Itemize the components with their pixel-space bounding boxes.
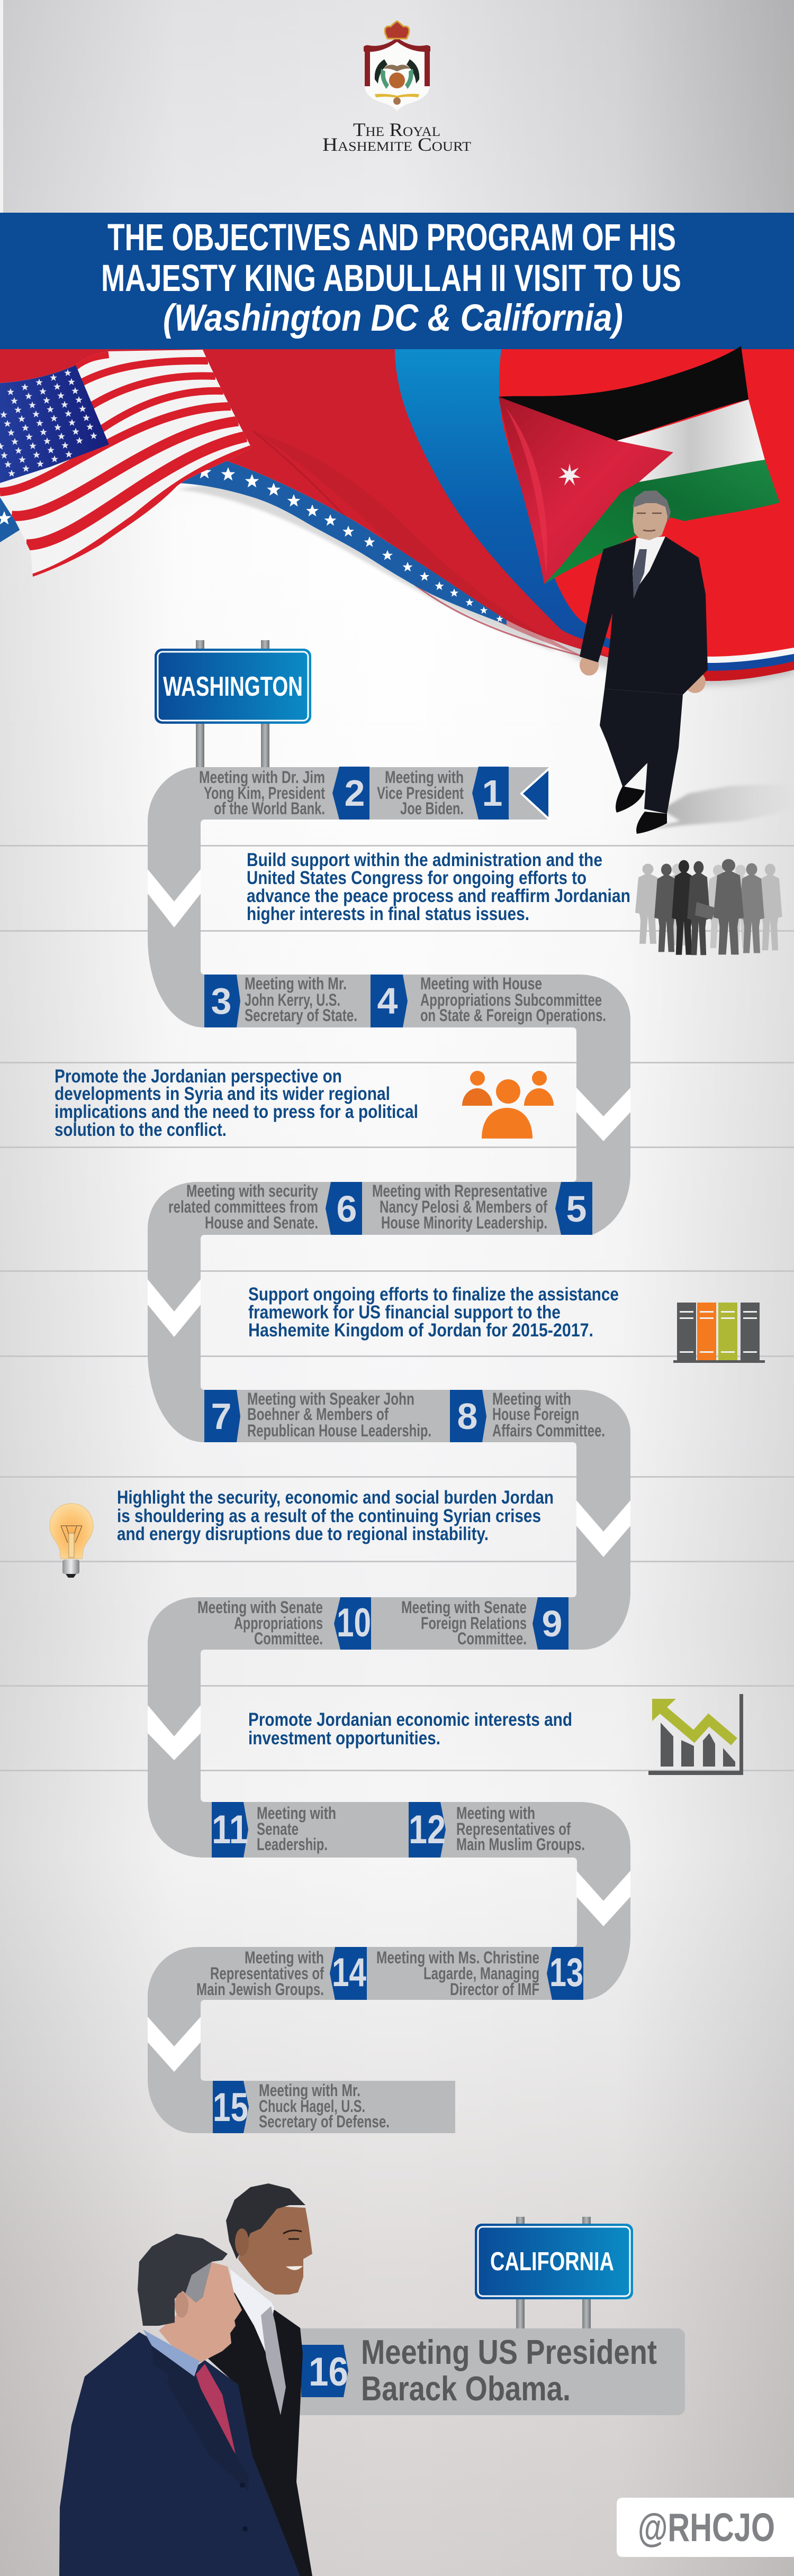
objective: burden on Jordan: and energy disruptions due to regional instability.	[117, 1524, 489, 1544]
objective: build support: United States Congress for ongoing efforts to	[247, 868, 587, 888]
step 1: 1	[482, 772, 502, 814]
step 3: Secretary of State.	[245, 1006, 357, 1025]
step 6: House and Senate.	[205, 1213, 318, 1232]
Washington sign: WASHINGTON	[163, 671, 303, 702]
objective: build support: advance the peace process and reaffirm Jordanian	[247, 886, 630, 906]
step 11: Meeting with	[257, 1804, 336, 1823]
step 7: Boehner & Members of	[247, 1405, 389, 1424]
California sign: CALIFORNIA	[490, 2247, 614, 2276]
logo text: Hashemite Court	[322, 134, 471, 155]
objective: assistance framework: Support ongoing efforts to finalize the assistance	[248, 1284, 619, 1305]
step 1	[377, 767, 509, 820]
step 4	[371, 974, 606, 1027]
step 7: Meeting with Speaker John	[247, 1389, 414, 1408]
step 11	[212, 1802, 336, 1858]
step 6: 6	[337, 1188, 357, 1230]
US flag stars	[0, 369, 97, 477]
tie	[633, 549, 647, 599]
step 7: 7	[211, 1396, 231, 1437]
banner: red left field	[0, 349, 610, 658]
icon: economic chart	[648, 1694, 743, 1775]
step 15: Meeting with Mr.	[259, 2081, 360, 2100]
tie	[196, 2364, 236, 2454]
step 1: Joe Biden.	[400, 799, 464, 818]
step 4: on State & Foreign Operations.	[420, 1006, 606, 1025]
shirt	[230, 2269, 274, 2354]
step 2: of the World Bank.	[214, 799, 325, 818]
objective: Syria perspective: developments in Syria and its wider regional	[55, 1084, 390, 1104]
objective: Syria perspective	[55, 1066, 418, 1140]
step 7	[204, 1389, 431, 1442]
step 12: Representatives of	[456, 1819, 571, 1838]
banner: star ribbon	[177, 460, 507, 625]
shirt	[633, 536, 665, 593]
icon: orange people group	[462, 1071, 554, 1139]
step 9: 9	[542, 1603, 562, 1644]
banner: blue ribbon	[395, 349, 794, 671]
objective: burden on Jordan: Highlight the security, economic and social burden Jordan	[117, 1487, 554, 1508]
step 3: Meeting with Mr.	[245, 974, 347, 993]
step 16: Meeting US President	[361, 2333, 657, 2371]
step 8: House Foreign	[492, 1405, 579, 1424]
step 13	[376, 1947, 583, 2000]
step 4: Meeting with House	[420, 974, 542, 993]
banner: small left ribbon	[0, 493, 23, 542]
red and blue flag banner	[0, 349, 794, 686]
title band: (Washington DC & California)	[163, 297, 623, 339]
step 10	[197, 1597, 371, 1650]
step 5: House Minority Leadership.	[381, 1213, 547, 1232]
President Obama figure	[208, 2183, 312, 2576]
step 1: Vice President	[377, 784, 464, 803]
step 10: 10	[337, 1600, 371, 1645]
hair	[633, 490, 671, 521]
step 8: 8	[457, 1396, 477, 1437]
face	[238, 2206, 312, 2295]
objective: build support: Build support within the administration and the	[247, 850, 602, 870]
step 10: Meeting with Senate	[197, 1598, 323, 1617]
objective: build support	[247, 850, 630, 924]
road chevrons	[148, 869, 630, 2072]
banner: red right field	[455, 349, 794, 681]
eye and brow	[283, 2231, 302, 2239]
step 8	[450, 1389, 605, 1442]
jacket	[580, 536, 708, 695]
icon: business people silhouettes	[635, 859, 782, 955]
step 15: 15	[213, 2085, 248, 2130]
step 12	[409, 1802, 585, 1858]
step 2	[199, 767, 369, 820]
step 9: Meeting with Senate	[401, 1598, 527, 1617]
step 14: Main Jewish Groups.	[196, 1980, 324, 1999]
step 11: Leadership.	[257, 1835, 328, 1854]
smile	[286, 2266, 303, 2270]
Washington sign	[155, 640, 311, 767]
hands	[580, 654, 599, 676]
icon: books on a shelf	[673, 1303, 765, 1363]
step 13: Meeting with Ms. Christine	[376, 1948, 539, 1967]
US flag	[0, 344, 259, 582]
King Abdullah with Obama figure	[59, 2234, 300, 2576]
objective: Syria perspective: Promote the Jordanian perspective on	[55, 1066, 342, 1087]
step 15	[213, 2081, 390, 2133]
step 9	[401, 1597, 569, 1650]
lapel	[152, 2346, 249, 2492]
face	[633, 500, 669, 540]
buttons	[240, 2482, 245, 2488]
step 15: Secretary of Defense.	[259, 2112, 390, 2131]
step 5: 5	[566, 1188, 587, 1230]
step 8: Meeting with	[492, 1389, 571, 1408]
step 8: Affairs Committee.	[492, 1421, 605, 1440]
ear	[235, 2228, 249, 2256]
horizontal section lines	[0, 845, 794, 1771]
facial features	[637, 513, 662, 531]
step 14	[196, 1947, 367, 2000]
step 5: Meeting with Representative	[372, 1181, 547, 1200]
step 11: 11	[212, 1807, 248, 1852]
objective: economic interests	[248, 1709, 572, 1749]
shirt collar	[143, 2329, 200, 2377]
step 7: Republican House Leadership.	[247, 1421, 431, 1440]
objective: burden on Jordan: is shouldering as a result of the continuing Syrian crises	[117, 1506, 541, 1526]
face	[159, 2262, 242, 2364]
title band	[0, 213, 794, 349]
royal court logo	[322, 21, 471, 155]
step 12: 12	[409, 1807, 446, 1852]
step 13: 13	[549, 1950, 583, 1995]
logo text	[322, 119, 471, 155]
step 13: Director of IMF	[450, 1980, 539, 1999]
step 9: Committee.	[457, 1629, 527, 1648]
step 6: related committees from	[168, 1197, 318, 1216]
step 11: Senate	[257, 1819, 299, 1838]
objective: assistance framework	[248, 1284, 619, 1341]
start arrow	[521, 768, 549, 820]
step 2: Yong Kim, President	[204, 784, 325, 803]
objective: Syria perspective: implications and the need to press for a political	[55, 1102, 418, 1122]
objective: build support: higher interests in final status issues.	[247, 904, 529, 924]
step 16	[286, 2328, 685, 2415]
hair	[226, 2183, 305, 2259]
step 4: Appropriations Subcommittee	[420, 990, 602, 1009]
step 3	[204, 974, 357, 1027]
step 14: Representatives of	[210, 1964, 324, 1983]
grey temple	[185, 2262, 212, 2302]
step 9: Foreign Relations	[421, 1614, 527, 1633]
step 4: 4	[377, 980, 398, 1022]
step 13: Lagarde, Managing	[423, 1964, 539, 1983]
objective: assistance framework: Hashemite Kingdom of Jordan for 2015-2017.	[248, 1320, 593, 1341]
objective: Syria perspective: solution to the conflict.	[55, 1119, 227, 1140]
trousers	[600, 689, 683, 814]
step 12: Main Muslim Groups.	[456, 1835, 585, 1854]
icon: light bulb	[50, 1504, 93, 1578]
step 2: 2	[345, 772, 365, 814]
ear	[175, 2292, 188, 2318]
suit	[208, 2292, 312, 2576]
objective: burden on Jordan	[117, 1487, 554, 1544]
figure shadow	[651, 784, 794, 829]
step 6: Meeting with security	[186, 1181, 318, 1200]
California sign	[475, 2217, 633, 2328]
step 15: Chuck Hagel, U.S.	[259, 2097, 365, 2116]
icon: royal crest	[364, 21, 430, 111]
step 6	[168, 1181, 362, 1235]
logo text: The Royal	[353, 119, 440, 140]
step 10: Committee.	[254, 1629, 323, 1648]
step 2: Meeting with Dr. Jim	[199, 768, 325, 787]
step 16: Barack Obama.	[361, 2369, 571, 2408]
shoes	[616, 786, 645, 813]
objective: economic interests: investment opportunities.	[248, 1728, 440, 1749]
step 3: 3	[211, 980, 231, 1022]
tie	[261, 2306, 286, 2415]
step 3: John Kerry, U.S.	[245, 990, 340, 1009]
hair	[138, 2234, 228, 2326]
step 1: Meeting with	[385, 768, 464, 787]
step 5	[372, 1181, 592, 1235]
objective: economic interests: Promote Jordanian economic interests and	[248, 1709, 572, 1730]
Jordan flag	[499, 346, 780, 584]
objective: assistance framework: framework for US financial support to the	[248, 1302, 561, 1323]
step 14: Meeting with	[245, 1948, 324, 1967]
winding road	[148, 767, 630, 2133]
suit	[59, 2332, 300, 2576]
step 14: 14	[332, 1950, 366, 1995]
step 5: Nancy Pelosi & Members of	[380, 1197, 547, 1216]
banner: white stripe	[635, 643, 794, 663]
step 12: Meeting with	[456, 1804, 535, 1823]
step 16: 16	[309, 2350, 348, 2395]
RHCJO handle box	[617, 2498, 794, 2557]
King Abdullah walking figure	[580, 490, 794, 834]
step 10: Appropriations	[234, 1614, 323, 1633]
